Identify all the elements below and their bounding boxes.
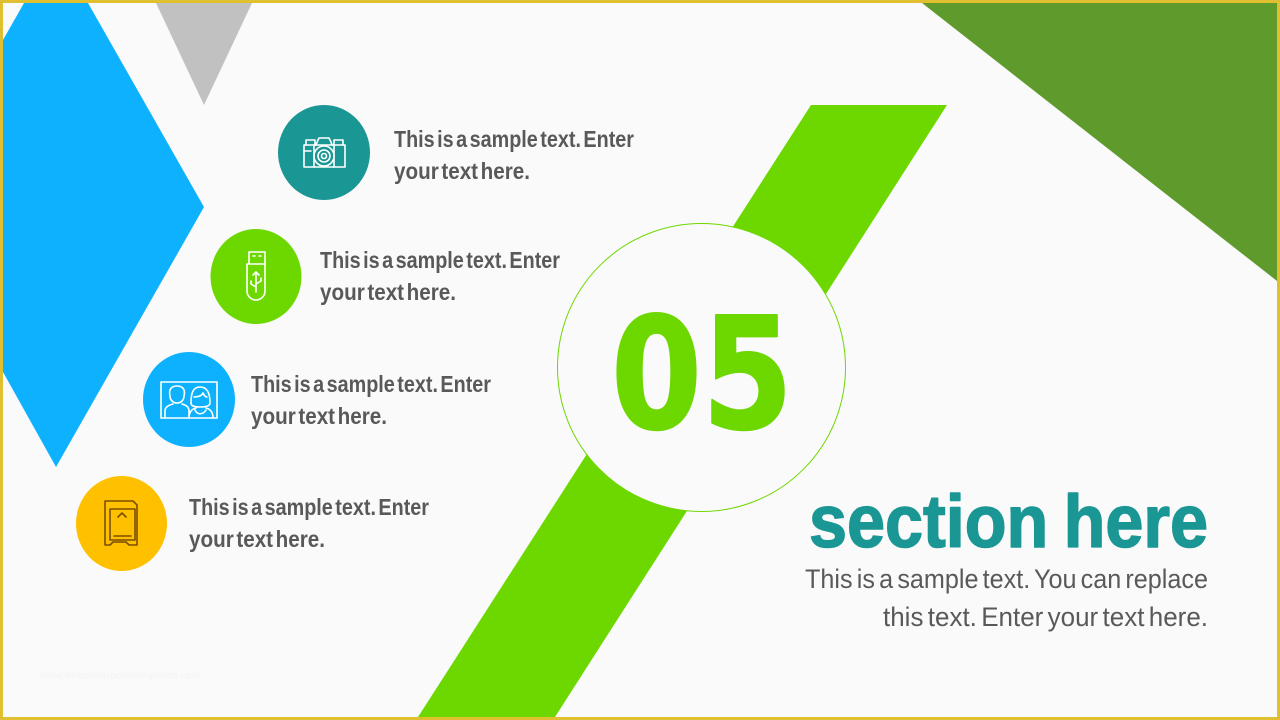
text: item 4: your text here. [189,526,325,552]
text: item 4: This is a sample text. Enter [189,494,429,520]
item 3: family photo [143,352,491,447]
text: item 3: This is a sample text. Enter [251,371,491,397]
text: item 3 [251,371,491,429]
item 1: camera [278,105,634,200]
text block: section description [805,564,1208,632]
text: item 2: This is a sample text. Enter [320,247,560,273]
heading: section here: section here [809,480,1208,563]
icon: SD card [76,476,167,571]
shape: bright green diagonal band [418,105,947,717]
text: item 1: This is a sample text. Enter [394,126,634,152]
text: item 1 [394,126,634,184]
number badge: 05: 05 [611,284,793,465]
text block: section description: This is a sample text. You can replace [805,564,1208,594]
text: item 1: your text here. [394,158,530,184]
number badge: 05 [558,224,846,512]
text: item 2 [320,247,560,305]
shape: dark green corner triangle [922,3,1277,281]
text: item 2: your text here. [320,279,456,305]
item 4: SD card [76,476,429,571]
icon: family photo [143,352,235,447]
watermark: www.freepowerpointtemplates.com [39,670,200,680]
icon: camera [278,105,370,200]
item 2: USB drive [210,229,560,324]
text: item 3: your text here. [251,403,387,429]
text: item 4 [189,494,429,552]
icon: USB drive [210,229,302,324]
shape: grey triangle [156,3,252,105]
shape: blue diamond [3,3,204,467]
text block: section description: this text. Enter your text here. [883,602,1208,632]
